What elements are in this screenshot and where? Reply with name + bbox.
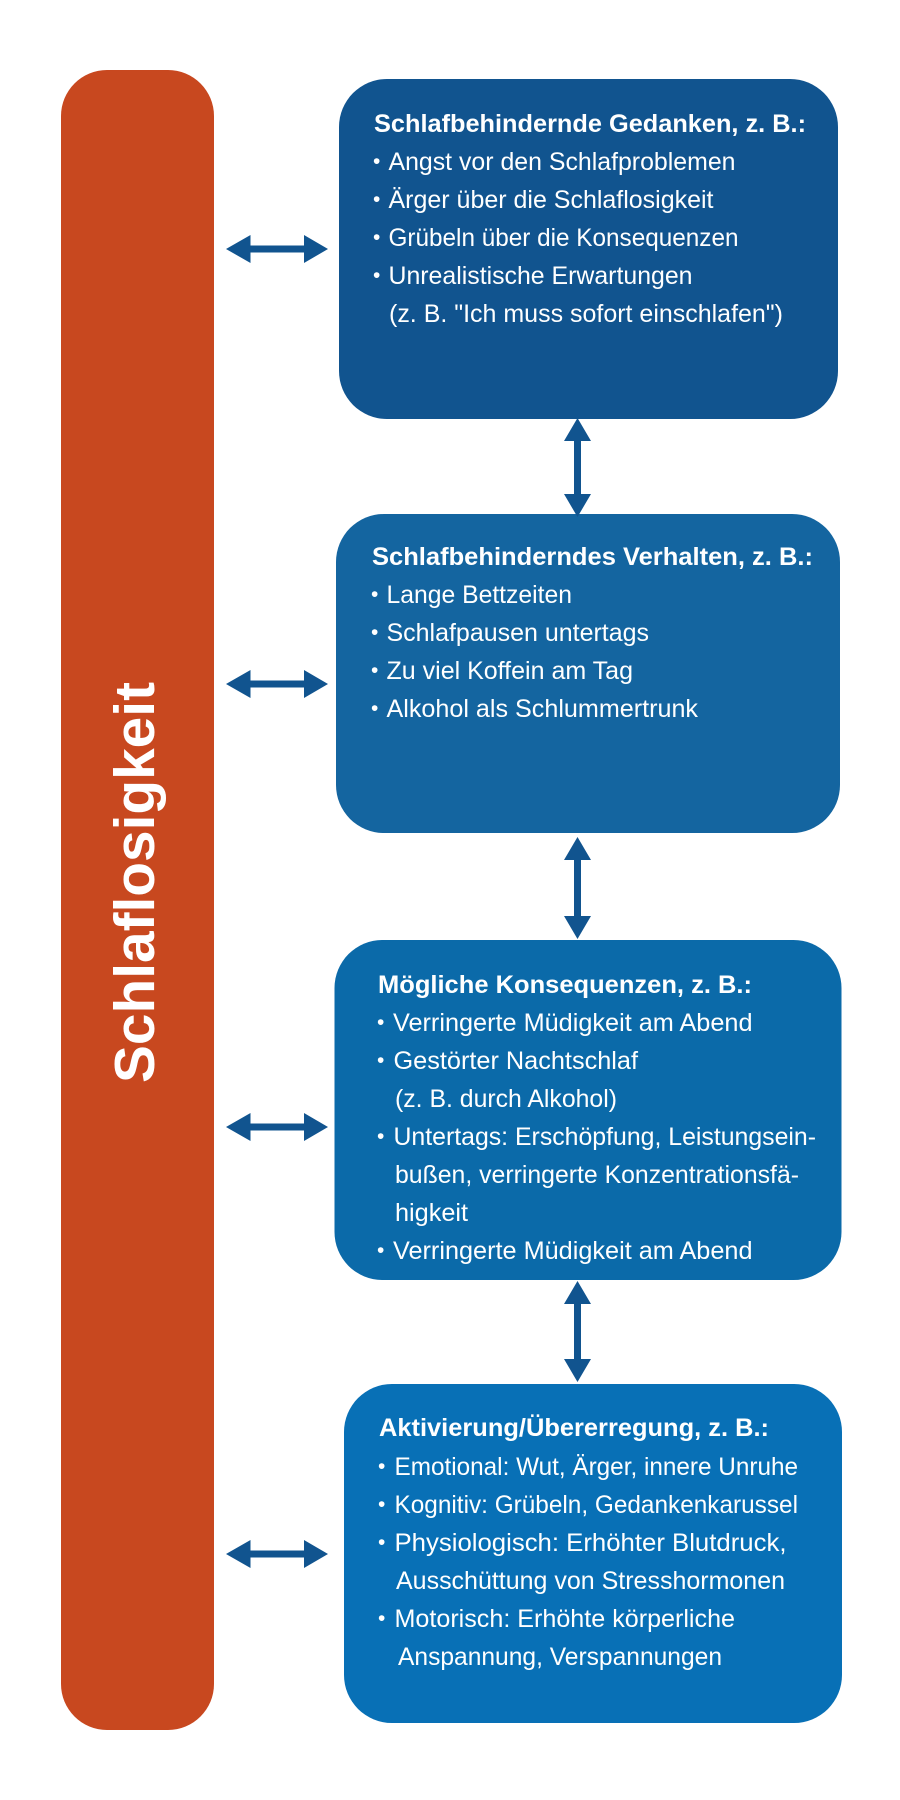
list: Aktivierung: Motorisch: Erhöhte körperliche: [394, 1605, 735, 1633]
list: Konsequenzen: Verringerte Müdigkeit am Abend: [393, 1237, 752, 1265]
arrow: bar to Aktivierung: [226, 1540, 328, 1568]
heading: Aktivierung/Übererregung: Aktivierung/Übererregung, z. B.:: [379, 1413, 769, 1442]
list: Konsequenzen: •: [377, 1125, 384, 1148]
arrow: bar to Konsequenzen: [226, 1113, 328, 1141]
list: Verhalten: •: [371, 697, 378, 720]
list: Verhalten: Zu viel Koffein am Tag: [386, 657, 633, 685]
list: Aktivierung: •: [378, 1531, 385, 1554]
list: Aktivierung: •: [378, 1607, 385, 1630]
panel: Schlafbehindernde Gedanken: [339, 79, 838, 419]
arrow: Gedanken to Verhalten: [564, 418, 591, 517]
list: Konsequenzen: Gestörter Nachtschlaf: [394, 1047, 638, 1075]
list: Konsequenzen: •: [377, 1239, 384, 1262]
list: Konsequenzen: •: [377, 1049, 384, 1072]
list: Verhalten: Alkohol als Schlummertrunk: [386, 695, 698, 723]
list: Aktivierung: [378, 1453, 798, 1671]
panel: Schlaflosigkeit side bar: [61, 70, 214, 1730]
list: Aktivierung: Physiologisch: Erhöhter Blutdruck,: [394, 1529, 786, 1557]
list: Gedanken: •: [373, 188, 380, 211]
list: Verhalten: Schlafpausen untertags: [386, 619, 649, 647]
list: Gedanken: Grübeln über die Konsequenzen: [388, 224, 738, 252]
list: Verhalten: •: [371, 659, 378, 682]
list: Aktivierung: Kognitiv: Grübeln, Gedankenkarussel: [394, 1491, 798, 1519]
list: Aktivierung: •: [378, 1455, 385, 1478]
list: Konsequenzen: higkeit: [395, 1199, 468, 1227]
list: Verhalten: [371, 581, 698, 723]
list: Konsequenzen: (z. B. durch Alkohol): [395, 1085, 617, 1113]
list: Gedanken: Ärger über die Schlaflosigkeit: [388, 186, 714, 214]
list: Aktivierung: Emotional: Wut, Ärger, innere Unruhe: [394, 1453, 798, 1481]
heading: Mögliche Konsequenzen: Mögliche Konsequenzen, z. B.:: [378, 971, 752, 999]
panel: Schlafbehinderndes Verhalten: [336, 514, 840, 833]
panel: Schlaflosigkeit side bar: Schlaflosigkeit: [103, 682, 167, 1083]
list: Verhalten: •: [371, 583, 378, 606]
list: Aktivierung: Ausschüttung von Stresshormonen: [396, 1567, 785, 1595]
list: Konsequenzen: [377, 1009, 816, 1265]
list: Konsequenzen: bußen, verringerte Konzentrationsfä-: [395, 1161, 799, 1189]
list: Verhalten: Lange Bettzeiten: [386, 581, 572, 609]
list: Gedanken: Angst vor den Schlafproblemen: [388, 148, 736, 176]
arrow: Verhalten to Konsequenzen: [564, 837, 591, 939]
list: Gedanken: •: [373, 264, 380, 287]
list: Gedanken: (z. B. "Ich muss sofort einschlafen"): [389, 300, 783, 328]
list: Gedanken: •: [373, 226, 380, 249]
panel: Mögliche Konsequenzen: [334, 940, 842, 1280]
list: Verhalten: •: [371, 621, 378, 644]
list: Gedanken: Unrealistische Erwartungen: [388, 262, 692, 290]
arrow: bar to Gedanken: [226, 235, 328, 263]
list: Gedanken: •: [373, 150, 380, 173]
list: Konsequenzen: Untertags: Erschöpfung, Leistungsein-: [394, 1123, 816, 1151]
list: Aktivierung: Anspannung, Verspannungen: [398, 1643, 722, 1671]
heading: Schlafbehinderndes Verhalten: Schlafbehinderndes Verhalten, z. B.:: [372, 543, 813, 571]
heading: Schlafbehindernde Gedanken: Schlafbehindernde Gedanken, z. B.:: [374, 110, 806, 138]
list: Gedanken: [373, 148, 783, 328]
arrow: Konsequenzen to Aktivierung: [564, 1281, 591, 1382]
panel: Aktivierung/Übererregung: [344, 1384, 842, 1723]
list: Konsequenzen: •: [377, 1011, 384, 1034]
arrow: bar to Verhalten: [226, 670, 328, 698]
list: Aktivierung: •: [378, 1493, 385, 1516]
list: Konsequenzen: Verringerte Müdigkeit am Abend: [393, 1009, 752, 1037]
